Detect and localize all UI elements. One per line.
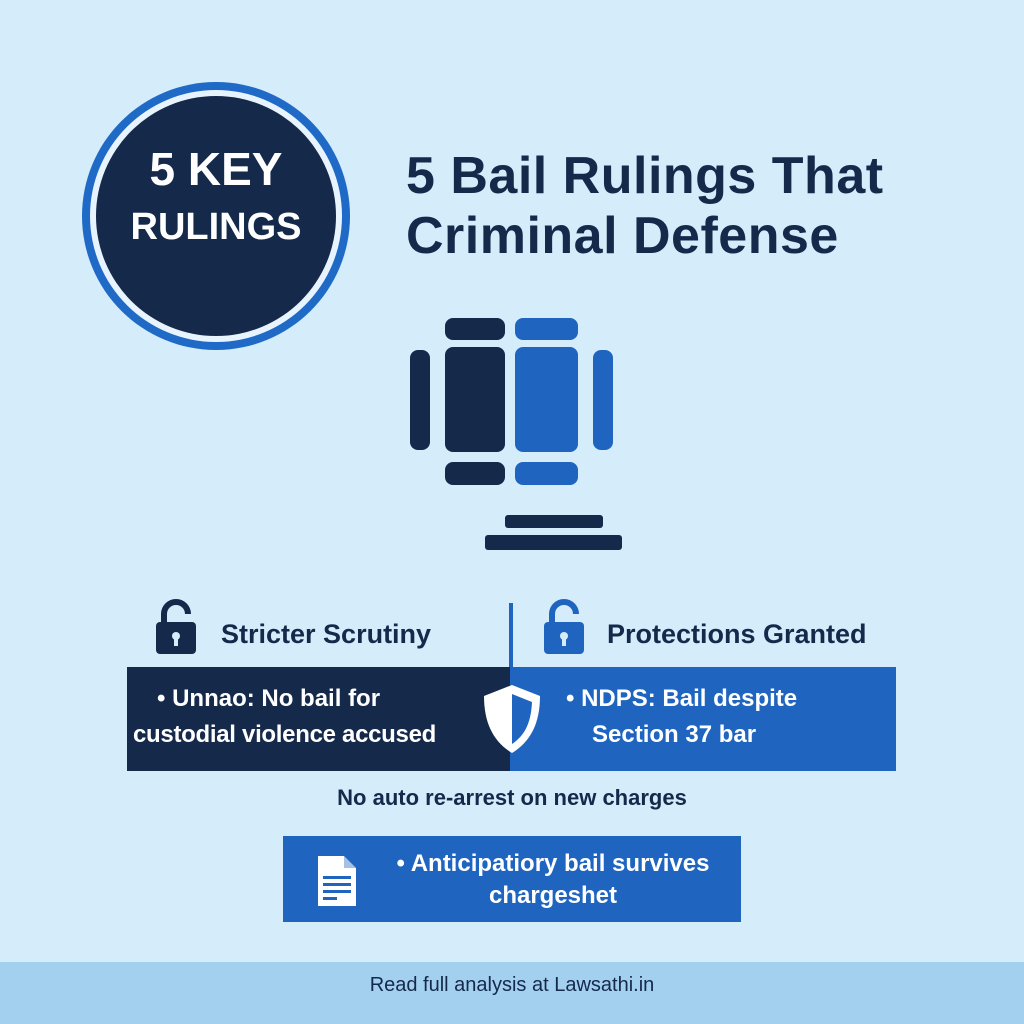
divider line [509, 603, 513, 668]
panel: anticipatory bail: • Anticipatiory bail survives [397, 850, 709, 877]
title: 5 Bail Rulings That [406, 147, 884, 205]
badge: 5 key rulings: 5 KEY [150, 143, 282, 195]
icon: gavel/scale [410, 318, 622, 550]
panel: protections granted [510, 667, 896, 771]
badge: 5 key rulings: RULINGS [130, 206, 302, 248]
panel: protections granted: • NDPS: Bail despite [566, 685, 797, 712]
footer: Read full analysis at Lawsathi.in [370, 974, 654, 996]
panel: anticipatory bail: chargeshet [489, 882, 617, 909]
panel: anticipatory bail [283, 836, 741, 922]
panel: stricter scrutiny [127, 667, 510, 771]
text: no auto re-arrest: No auto re-arrest on new charges [337, 785, 687, 810]
icon: shield [484, 685, 540, 753]
icon: lock blue [544, 599, 584, 654]
icon: document [318, 856, 356, 906]
heading: protections granted: Protections Granted [607, 619, 867, 649]
title [406, 147, 884, 265]
icon: lock navy [156, 599, 196, 654]
title: Criminal Defense [406, 207, 839, 265]
panel: protections granted: Section 37 bar [592, 721, 756, 748]
panel: stricter scrutiny: • Unnao: No bail for [157, 685, 380, 712]
panel: stricter scrutiny: custodial violence accused [133, 721, 436, 748]
footer [0, 962, 1024, 1024]
heading: stricter scrutiny: Stricter Scrutiny [221, 619, 431, 649]
badge: 5 key rulings [82, 82, 350, 350]
